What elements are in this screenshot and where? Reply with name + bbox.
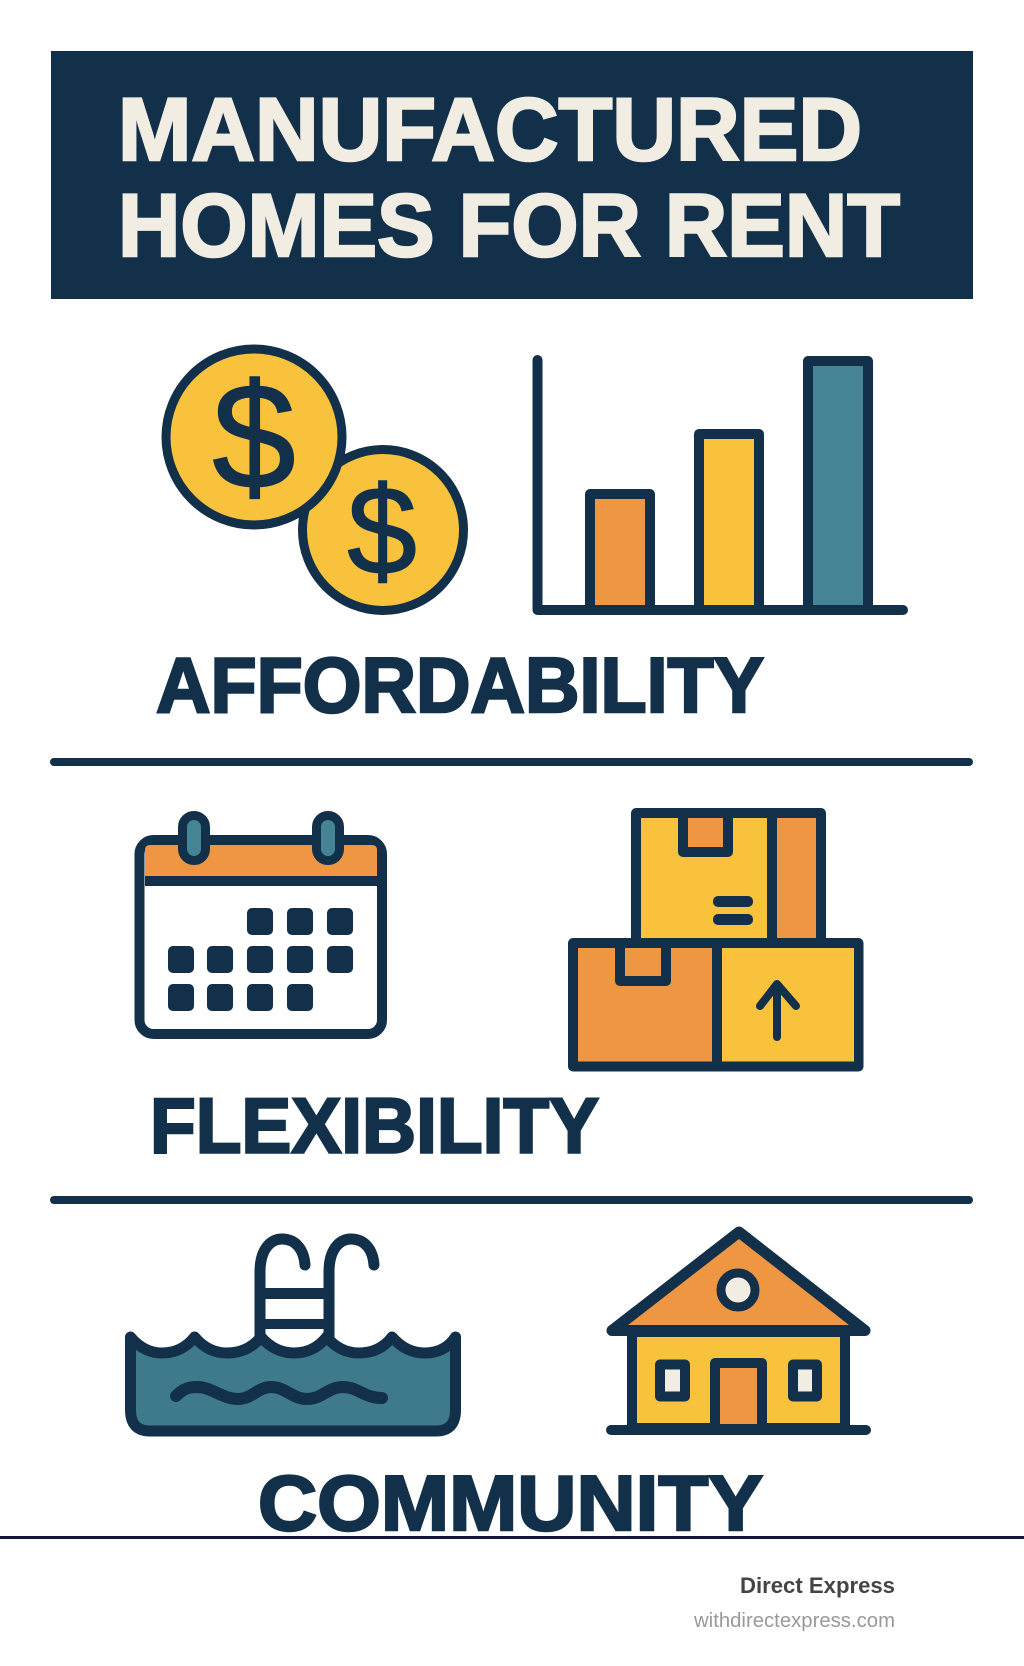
footer: brand: [693, 1573, 895, 1632]
panel: community: [130, 1232, 871, 1547]
icon: calendar: [140, 816, 382, 1034]
icon: coins: [166, 349, 464, 610]
title line 1: MANUFACTURED: [118, 79, 862, 179]
panel: flexibility: [140, 813, 858, 1170]
website: withdirectexpress.com: [693, 1610, 895, 1632]
panel: affordability: [156, 349, 903, 729]
icon: up arrow: [760, 984, 796, 1037]
bar chart: [538, 360, 903, 610]
icon: moving boxes: [573, 813, 858, 1066]
heading: affordability: AFFORDABILITY: [156, 641, 764, 729]
heading: community: COMMUNITY: [258, 1459, 763, 1547]
title line 2: HOMES FOR RENT: [118, 175, 900, 275]
icon: swimming pool: [130, 1239, 456, 1431]
heading: flexibility: FLEXIBILITY: [150, 1082, 599, 1170]
icon: coins: $: [212, 352, 296, 520]
icon: house: [606, 1232, 871, 1435]
icon: coins: $: [347, 462, 417, 601]
title banner: [51, 51, 973, 299]
brand name: Direct Express: [740, 1573, 895, 1598]
